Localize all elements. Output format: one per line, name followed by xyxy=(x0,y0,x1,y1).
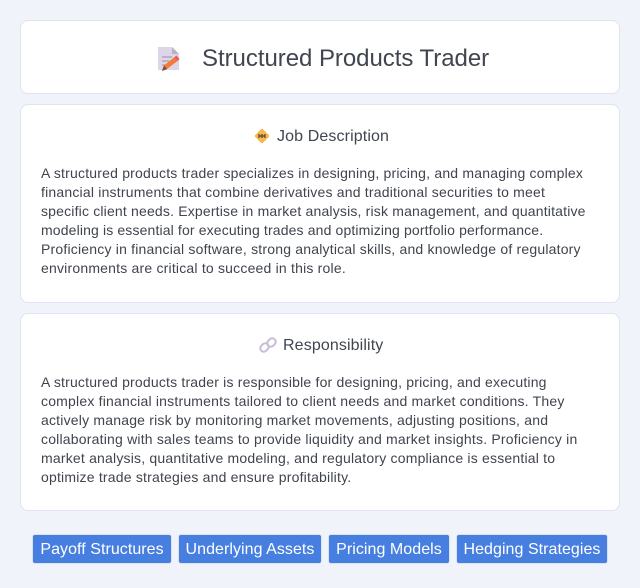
tag: underlying assets: Underlying Assets xyxy=(186,541,314,558)
icon: diamond sign xyxy=(254,128,270,144)
tag: payoff structures xyxy=(32,534,172,564)
text block: responsibility: collaborating with sales teams to provide liquidity and market insights. Proficiency in xyxy=(41,431,577,447)
panel: responsibility xyxy=(20,313,620,511)
tag: pricing models xyxy=(328,534,450,564)
text block: responsibility: A structured products trader is responsible for designing, pricing, and executing xyxy=(41,374,547,390)
tag: pricing models: Pricing Models xyxy=(336,541,442,558)
icon: chain link xyxy=(259,337,277,353)
text block: responsibility: optimize trade strategies and ensure profitability. xyxy=(41,469,351,485)
panel: job description xyxy=(20,104,620,303)
text block: job description: modeling is essential for executing trades and optimizing portfolio performance. xyxy=(41,222,543,238)
icon: document with pencil xyxy=(158,47,180,71)
heading: responsibility: Responsibility xyxy=(283,337,383,354)
text block: job description: specific client needs. Expertise in market analysis, risk management, and quantitative xyxy=(41,203,586,219)
text block: job description: Proficiency in financial software, strong analytical skills, and knowledge of regulatory xyxy=(41,241,581,257)
tag: hedging strategies xyxy=(456,534,608,564)
text block: responsibility xyxy=(41,374,577,485)
text block: responsibility: actively manage risk by monitoring market movements, adjusting positions, and xyxy=(41,412,548,428)
tag: hedging strategies: Hedging Strategies xyxy=(464,541,600,558)
text block: job description xyxy=(41,165,586,276)
panel: title card xyxy=(20,20,620,94)
title: Structured Products Trader xyxy=(202,45,489,72)
text block: job description: A structured products trader specializes in designing, pricing, and managing complex xyxy=(41,165,583,181)
text block: job description: financial instruments that combine derivatives and traditional securities to meet xyxy=(41,184,545,200)
text block: responsibility: market analysis, quantitative modeling, and regulatory compliance is essential to xyxy=(41,450,555,466)
text block: responsibility: complex financial instruments tailored to client needs and market conditions. They xyxy=(41,393,565,409)
tag: payoff structures: Payoff Structures xyxy=(40,541,164,558)
tag: underlying assets xyxy=(178,534,322,564)
text block: job description: environments are critical to succeed in this role. xyxy=(41,260,346,276)
heading: job description: Job Description xyxy=(277,128,389,145)
